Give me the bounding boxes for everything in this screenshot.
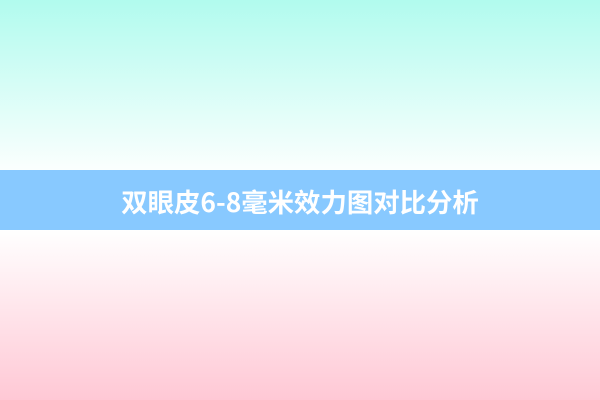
title: 双眼皮6-8毫米效力图对比分析 — [121, 181, 479, 220]
title band — [0, 170, 600, 230]
